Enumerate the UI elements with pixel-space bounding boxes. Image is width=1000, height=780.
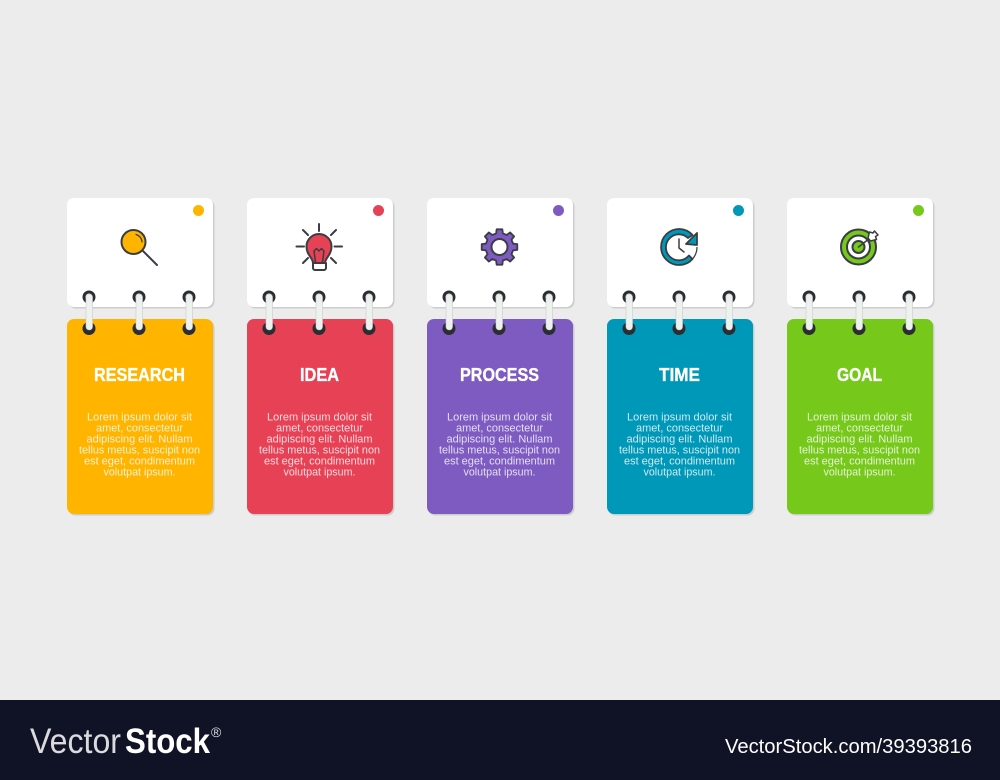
body text: goal: est eget, condimentum	[804, 456, 915, 468]
heading: time: TIME	[659, 365, 700, 385]
body text: idea: est eget, condimentum	[264, 456, 375, 468]
white top card: idea	[247, 198, 393, 307]
body text: research	[79, 412, 200, 478]
logo: VectorStock	[30, 722, 222, 761]
body text: idea	[259, 412, 380, 478]
body text: time: est eget, condimentum	[624, 456, 735, 468]
icon: gear	[482, 229, 517, 265]
body text: process: volutpat ipsum.	[464, 466, 536, 478]
coloured card: goal	[787, 319, 933, 514]
binding rings: research	[82, 292, 196, 335]
body text: idea: volutpat ipsum.	[284, 466, 356, 478]
status dot: process	[553, 205, 564, 216]
coloured card: time	[607, 319, 753, 514]
panel: goal	[787, 198, 934, 516]
body text: time: volutpat ipsum.	[644, 466, 716, 478]
body text: research: amet, consectetur	[96, 422, 183, 434]
body text: goal: tellus metus, suscipit non	[799, 444, 920, 456]
image id url: VectorStock.com/39393816	[725, 736, 972, 758]
icon: target with dart	[841, 230, 878, 264]
binding rings: goal	[802, 292, 916, 335]
icon: magnifying glass	[122, 230, 157, 265]
white top card: research	[67, 198, 213, 307]
binding rings: idea	[262, 292, 376, 335]
coloured card: research	[67, 319, 213, 514]
heading: goal: GOAL	[837, 365, 882, 385]
body text: time	[619, 412, 740, 478]
logo: VectorStock: Vector	[30, 722, 121, 761]
body text: goal	[799, 412, 920, 478]
status dot: time	[733, 205, 744, 216]
body text: idea: adipiscing elit. Nullam	[266, 434, 372, 446]
heading: idea: IDEA	[300, 365, 339, 385]
body text: time: adipiscing elit. Nullam	[626, 434, 732, 446]
coloured card: process	[427, 319, 573, 514]
heading: research: RESEARCH	[94, 365, 185, 385]
body text: process	[439, 412, 560, 478]
status dot: research	[193, 205, 204, 216]
body text: time: Lorem ipsum dolor sit	[627, 412, 732, 424]
body text: idea: tellus metus, suscipit non	[259, 444, 380, 456]
body text: goal: Lorem ipsum dolor sit	[807, 412, 912, 424]
panel: idea	[247, 198, 394, 516]
status dot: idea	[373, 205, 384, 216]
white top card: goal	[787, 198, 933, 307]
body text: research: est eget, condimentum	[84, 456, 195, 468]
body text: time: amet, consectetur	[636, 422, 723, 434]
body text: idea: amet, consectetur	[276, 422, 363, 434]
binding rings: process	[442, 292, 556, 335]
footer bar	[0, 700, 1000, 780]
body text: process: adipiscing elit. Nullam	[446, 434, 552, 446]
logo: VectorStock: Stock	[125, 722, 210, 761]
coloured card: idea	[247, 319, 393, 514]
icon: light bulb	[296, 224, 342, 270]
body text: research: adipiscing elit. Nullam	[86, 434, 192, 446]
heading: process: PROCESS	[460, 365, 539, 385]
body text: research: tellus metus, suscipit non	[79, 444, 200, 456]
body text: process: est eget, condimentum	[444, 456, 555, 468]
body text: process: Lorem ipsum dolor sit	[447, 412, 552, 424]
body text: research: volutpat ipsum.	[104, 466, 176, 478]
white top card: process	[427, 198, 573, 307]
body text: goal: amet, consectetur	[816, 422, 903, 434]
white top card: time	[607, 198, 753, 307]
panel: time	[607, 198, 754, 516]
binding rings: time	[622, 292, 736, 335]
body text: goal: volutpat ipsum.	[824, 466, 896, 478]
body text: goal: adipiscing elit. Nullam	[806, 434, 912, 446]
body text: process: tellus metus, suscipit non	[439, 444, 560, 456]
panel: research	[67, 198, 214, 516]
body text: idea: Lorem ipsum dolor sit	[267, 412, 372, 424]
status dot: goal	[913, 205, 924, 216]
logo: VectorStock: ®	[211, 724, 222, 740]
panel: process	[427, 198, 574, 516]
icon: clock with arrow	[661, 229, 697, 265]
body text: time: tellus metus, suscipit non	[619, 444, 740, 456]
body text: research: Lorem ipsum dolor sit	[87, 412, 192, 424]
body text: process: amet, consectetur	[456, 422, 543, 434]
